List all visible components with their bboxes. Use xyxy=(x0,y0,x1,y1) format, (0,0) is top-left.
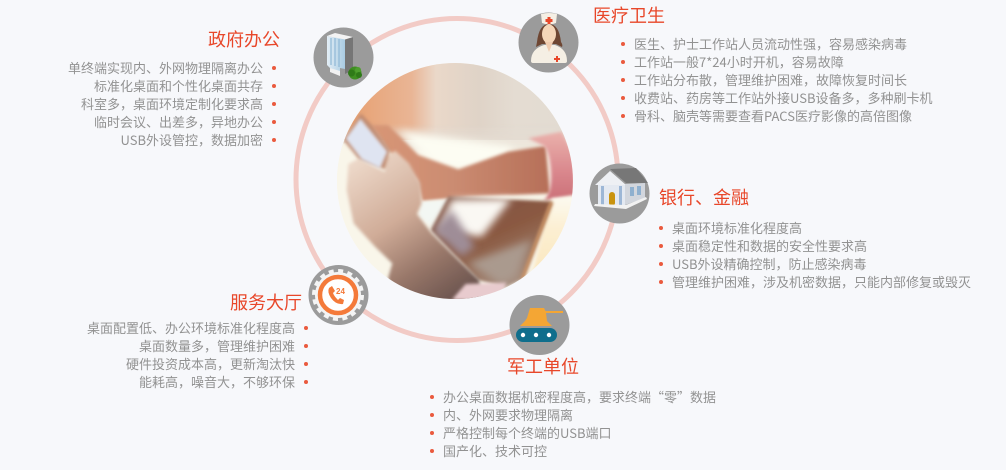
icon: 24-hour service gear xyxy=(308,265,368,325)
icon: government building xyxy=(314,28,374,88)
central graphic: ring, photo and icons xyxy=(294,12,650,355)
text block: service hall list: 硬件投资成本高，更新淘汰快 xyxy=(126,354,295,373)
text block: banking list xyxy=(659,218,971,291)
text block: government office list: 标准化桌面和个性化桌面共存 xyxy=(94,76,263,95)
text block: healthcare list xyxy=(621,34,933,125)
text block: healthcare list: 医生、护士工作站人员流动性强，容易感染病毒 xyxy=(634,34,907,53)
text block: military list: 国产化、技术可控 xyxy=(443,441,547,460)
text block: healthcare list: 收费站、药房等工作站外接USB设备多，多种刷卡机 xyxy=(634,88,933,107)
text block: service hall list xyxy=(87,318,308,391)
text block: military list: 严格控制每个终端的USB端口 xyxy=(443,423,612,442)
text block: government office list: USB外设管控，数据加密 xyxy=(120,130,263,149)
text block: government office list: 临时会议、出差多，异地办公 xyxy=(94,112,263,131)
text block: service hall list: 能耗高，噪音大，不够环保 xyxy=(139,372,295,391)
text block: banking list: 管理维护困难，涉及机密数据，只能内部修复或毁灭 xyxy=(672,272,971,291)
text block: service hall list: 桌面数量多，管理维护困难 xyxy=(139,336,295,355)
text block: service hall list: 桌面配置低、办公环境标准化程度高 xyxy=(87,318,295,337)
heading: government office: 政府办公 xyxy=(208,26,280,52)
heading: banking and finance: 银行、金融 xyxy=(659,184,749,210)
center photo xyxy=(335,60,577,305)
text block: government office list: 单终端实现内、外网物理隔离办公 xyxy=(68,58,263,77)
heading: service hall: 服务大厅 xyxy=(230,289,302,315)
text block: healthcare list: 骨科、脑壳等需要查看PACS医疗影像的高倍图像 xyxy=(634,106,912,125)
text block: government office list: 科室多，桌面环境定制化要求高 xyxy=(81,94,263,113)
text block: banking list: 桌面稳定性和数据的安全性要求高 xyxy=(672,236,867,255)
ring xyxy=(296,18,618,340)
text block: military list xyxy=(430,387,716,460)
text block: banking list: 桌面环境标准化程度高 xyxy=(672,218,802,237)
heading: healthcare: 医疗卫生 xyxy=(593,2,665,28)
text block: military list: 办公桌面数据机密程度高，要求终端“零”数据 xyxy=(443,387,716,406)
text block: healthcare list: 工作站一般7*24小时开机，容易故障 xyxy=(634,52,844,71)
text block: military list: 内、外网要求物理隔离 xyxy=(443,405,573,424)
icon: 24-hour service gear: 24 xyxy=(336,287,345,296)
text block: banking list: USB外设精确控制，防止感染病毒 xyxy=(672,254,867,273)
text block: healthcare list: 工作站分布散，管理维护困难，故障恢复时间长 xyxy=(634,70,907,89)
heading: military units: 军工单位 xyxy=(507,353,579,379)
icon: nurse xyxy=(518,12,578,72)
text block: government office list xyxy=(68,58,276,149)
icon: tank xyxy=(510,295,570,355)
icon: bank xyxy=(590,164,650,224)
